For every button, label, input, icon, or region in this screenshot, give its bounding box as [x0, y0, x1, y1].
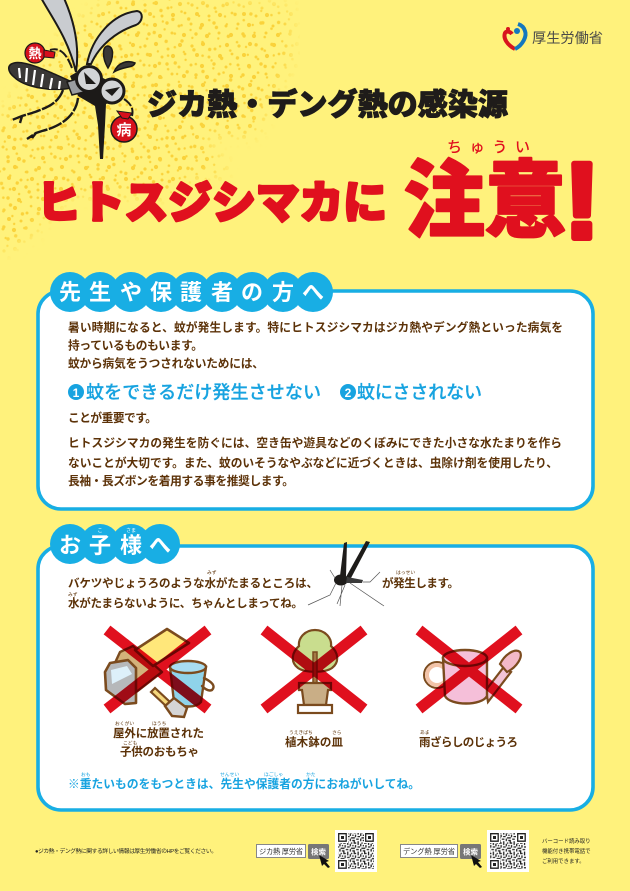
icon: red cross over watering can: [419, 630, 519, 709]
illustration: watering can: [424, 650, 521, 704]
heading: source of infection subtitle: ジカ熱・デング熱の感染源: [147, 88, 508, 122]
illustration: plant pot saucer: [293, 630, 337, 713]
caption: watering can: [419, 730, 518, 749]
caption: abandoned toys: 子供のおもちゃ: [120, 744, 199, 758]
note: ask an adult: ほごしゃ: [264, 771, 283, 778]
text block: children's message: が発生します。: [382, 576, 459, 590]
heading: for children: お: [59, 533, 81, 558]
panel: for teachers and guardians: [38, 272, 593, 509]
icon: red bag labelled disease: 病: [116, 122, 132, 139]
caption: plant pot saucer: さら: [332, 729, 342, 736]
note: barcode capable phones: ご利用できます。: [542, 857, 585, 865]
heading: for teachers and guardians: へ: [302, 280, 324, 305]
callout: two key points: 蚊をできるだけ発生させない: [86, 382, 321, 402]
text block: importance: ことが重要です。: [68, 411, 157, 425]
heading: for children: [50, 524, 180, 564]
text block: intro: 暑い時期になると、蚊が発生します。特にヒトスジシマカはジカ熱やデング熱といった病気を: [68, 320, 563, 334]
title part: caution: 注意: [404, 154, 566, 248]
heading: for teachers and guardians: や: [120, 280, 142, 305]
panel: for children: [38, 524, 593, 810]
title part: species name: ヒトスジシマカに: [37, 179, 387, 228]
icon: red cross over plant pot: [264, 630, 364, 709]
icon: red cross over toys: [107, 630, 208, 709]
icon: dump truck: [105, 629, 189, 704]
callout: two key points: 蚊にさされない: [357, 382, 482, 402]
note: barcode capable phones: バーコード読み取り: [542, 837, 591, 845]
note: ask an adult: おも: [81, 771, 91, 778]
text block: children's message: 水がたまらないように、ちゃんとしまってね。: [68, 596, 303, 610]
text block: children's message: バケツやじょうろのような水がたまるところは、: [68, 576, 318, 590]
caption: abandoned toys: こども: [123, 740, 138, 746]
note: ask an adult: ※重たいものをもつときは、先生や保護者の方におねがいしてね。: [68, 777, 420, 791]
QR code: zika: [335, 830, 377, 872]
text block: intro: 持っているものもいます。: [68, 338, 203, 352]
caption: plant pot saucer: [285, 729, 344, 749]
caption: plant pot saucer: 植木鉢の皿: [285, 735, 344, 749]
heading: for children: 様: [120, 533, 142, 558]
search box: dengue: 検索: [463, 846, 478, 856]
note: ask an adult: せんせい: [220, 772, 239, 778]
icon: red bag labelled disease: [111, 111, 137, 142]
caption: watering can: 雨ざらしのじょうろ: [419, 735, 518, 749]
logo: ministry of health: 厚生労働省: [532, 30, 603, 47]
callout: two key points: 2: [345, 386, 352, 400]
text block: prevention advice: 長袖・長ズボンを着用する事を推奨します。: [68, 474, 294, 488]
search box: zika: [256, 844, 330, 868]
text block: prevention advice: [68, 436, 562, 488]
illustration: abandoned toys: [105, 629, 214, 717]
logo: ministry of health: [504, 24, 603, 49]
text block: prevention advice: ヒトスジシマカの発生を防ぐには、空き缶や遊具などのくぼみにできた小さな水たまりを作ら: [68, 436, 562, 450]
note: ask an adult: かた: [306, 771, 316, 778]
note: barcode capable phones: 機能付き携帯電話で: [542, 847, 591, 855]
heading: for teachers and guardians: 者: [211, 280, 233, 305]
QR code: dengue: [487, 830, 529, 872]
icon: bucket: [170, 661, 214, 706]
callout: two key points: [68, 382, 482, 402]
text block: intro: 蚊から病気をうつされないためには、: [68, 356, 264, 370]
icon: shovel: [151, 688, 187, 717]
title part: exclamation mark: !: [564, 140, 600, 261]
search box: zika: ジカ熱 厚労省: [259, 847, 303, 856]
heading: for children: さま: [126, 527, 136, 534]
icon: red bag with kanji: 熱: [28, 46, 42, 61]
icon: red bag with kanji: [25, 43, 55, 63]
heading: for children: こ: [97, 528, 103, 534]
heading: for teachers and guardians: 保: [150, 280, 172, 305]
search box: dengue: デング熱 厚労省: [403, 847, 455, 856]
heading: for teachers and guardians: の: [241, 280, 263, 305]
caption: plant pot saucer: うえきばち: [289, 729, 313, 736]
note: barcode capable phones: [542, 837, 591, 865]
search box: zika: 検索: [311, 846, 326, 856]
text block: intro: [68, 320, 563, 370]
callout: two key points: 1: [73, 386, 80, 400]
title: aedes albopictus warning: [37, 139, 600, 261]
footer note: ●ジカ熱・デング熱に関する詳しい情報は厚生労働省のHPをご覧ください。: [35, 847, 217, 855]
text block: children's message: はっせい: [396, 570, 415, 576]
search box: dengue: [400, 844, 482, 868]
heading: for teachers and guardians: 方: [272, 280, 294, 305]
text block: children's message: みず: [68, 591, 78, 598]
text block: children's message: みず: [207, 569, 217, 576]
heading: for teachers and guardians: 護: [180, 280, 202, 305]
caption: abandoned toys: おくがい: [115, 720, 134, 727]
text block: prevention advice: ないことが大切です。また、蚊のいそうなやぶなどに近づくときは、虫除け剤を使用したり、: [68, 456, 558, 470]
speckled dot texture: [0, 0, 300, 260]
note: ask an adult: [68, 771, 420, 791]
heading: for teachers and guardians: 生: [89, 280, 111, 305]
caption: watering can: あま: [420, 730, 430, 736]
caption: abandoned toys: [113, 720, 204, 758]
heading: for teachers and guardians: [50, 272, 333, 312]
title ruby: chuui: ちゅうい: [447, 139, 530, 156]
icon: mosquito carrying disease bags: [9, 0, 142, 159]
caption: abandoned toys: 屋外に放置された: [113, 726, 204, 740]
heading: for children: 子: [89, 533, 111, 558]
text block: children's message: [68, 569, 459, 610]
heading: for teachers and guardians: 先: [59, 280, 81, 305]
caption: abandoned toys: ほうち: [152, 721, 167, 727]
icon: small mosquito: [308, 541, 384, 606]
heading: for children: へ: [149, 533, 171, 558]
